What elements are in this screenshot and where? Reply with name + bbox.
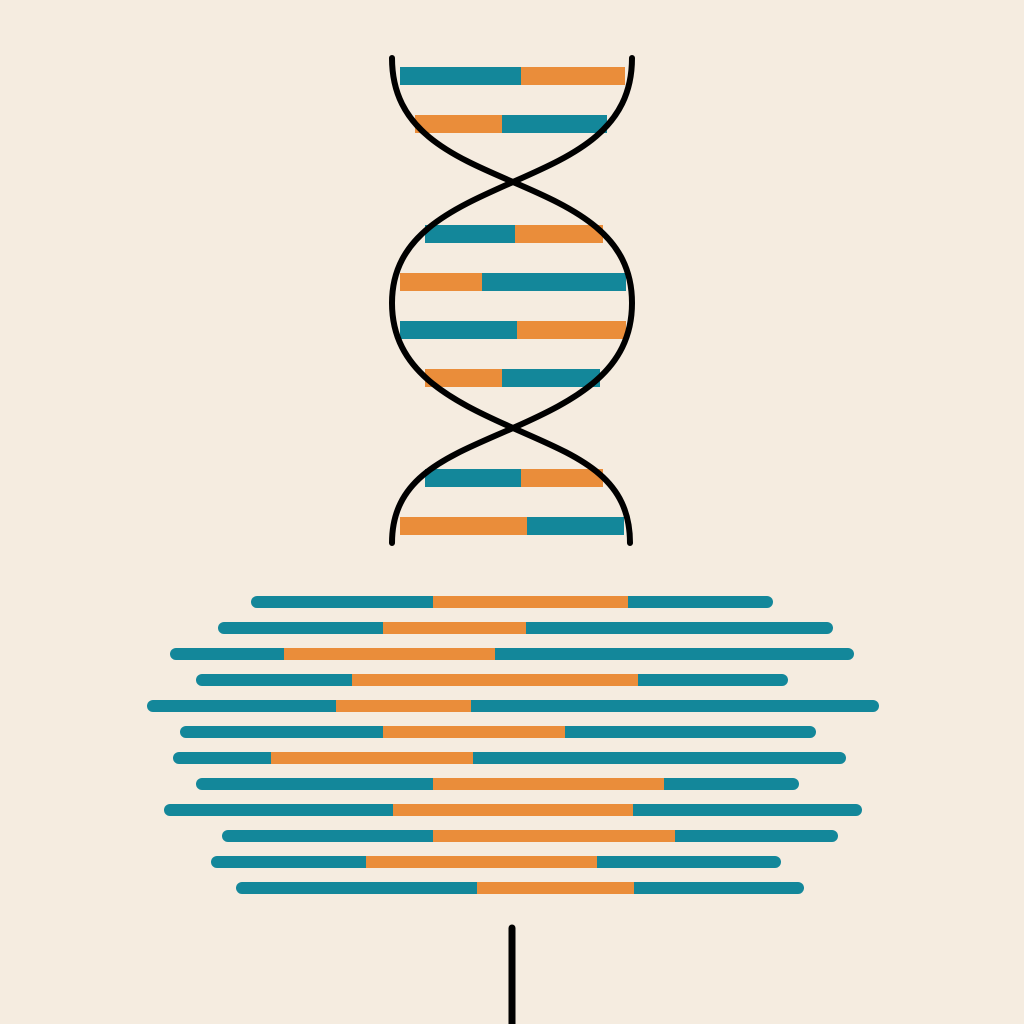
sequence bars: [153, 602, 873, 888]
helix rungs: [400, 76, 626, 526]
vertical stem line: [508, 928, 516, 1024]
helix strands: [392, 58, 632, 543]
DNA double helix: [392, 58, 632, 543]
